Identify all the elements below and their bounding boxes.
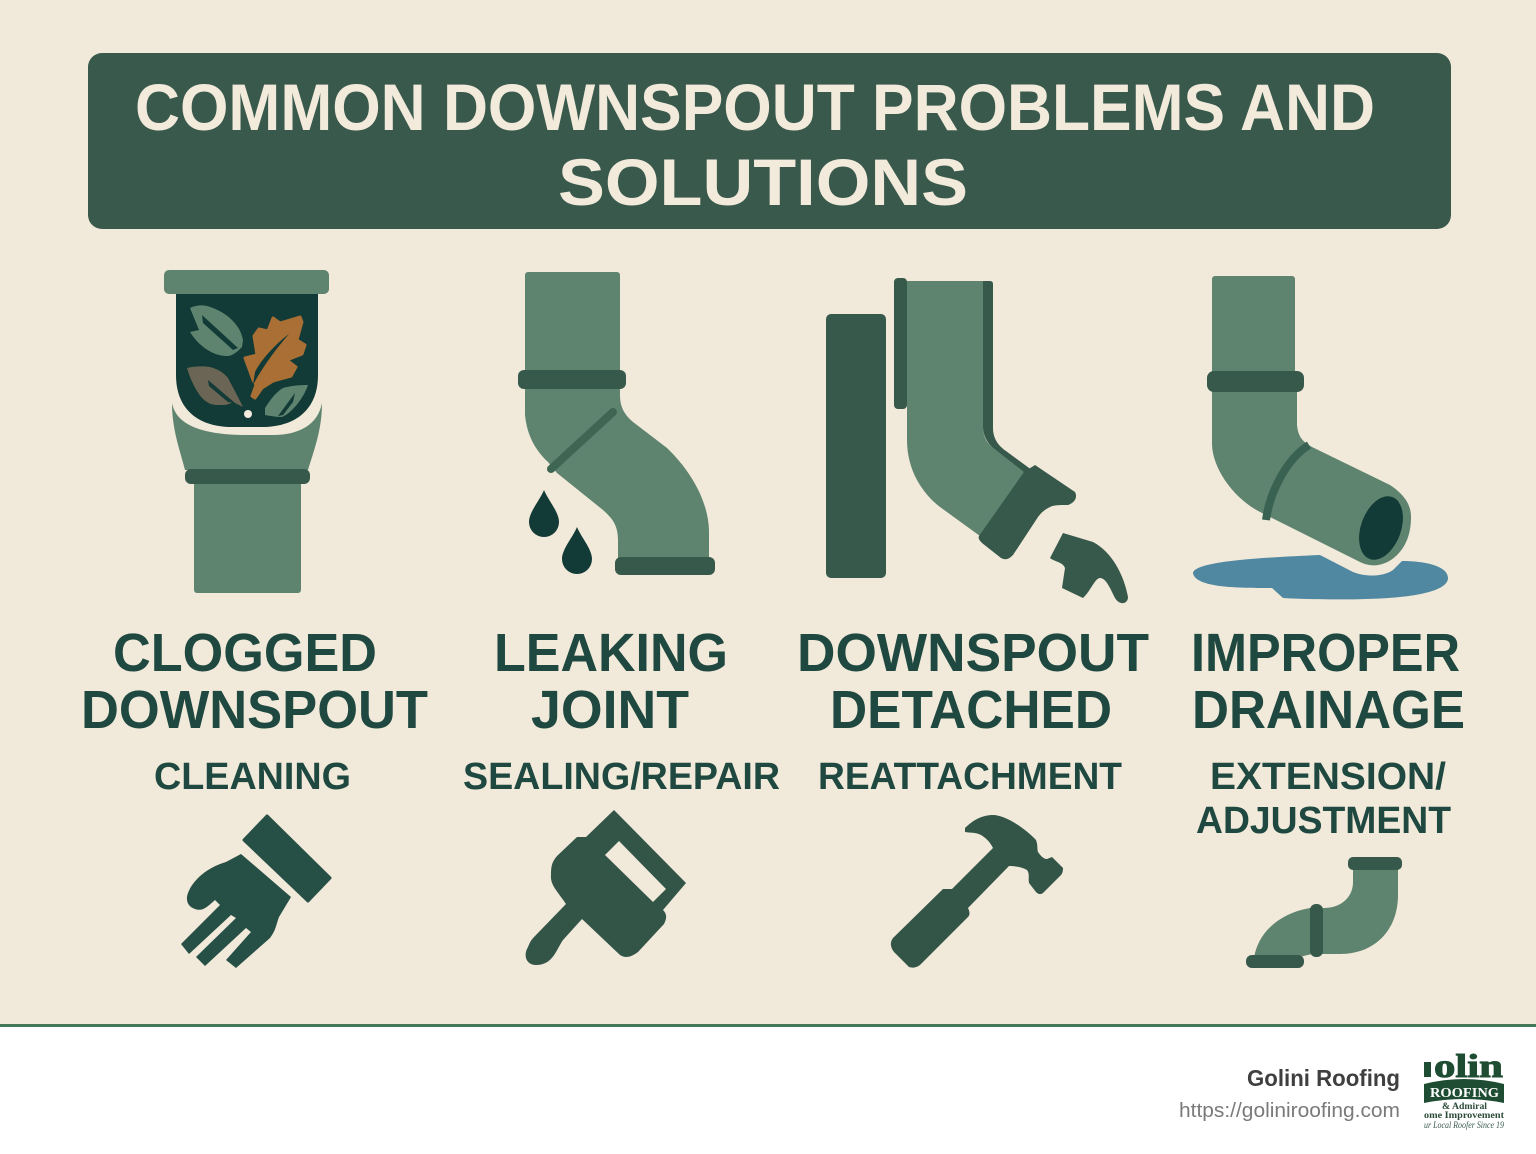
heading: downspout detached — [797, 623, 1149, 740]
heading: improper drainage: DRAINAGE — [1192, 680, 1465, 740]
icon: extension pipe — [1246, 857, 1402, 968]
solution label: extension/adjustment: EXTENSION/ — [1210, 756, 1446, 798]
heading: downspout detached: DETACHED — [830, 680, 1112, 740]
heading: clogged downspout — [81, 623, 428, 740]
title banner: COMMON DOWNSPOUT PROBLEMS AND — [135, 70, 1375, 144]
logo: olin — [1434, 1049, 1503, 1085]
panel: downspout detached — [797, 278, 1149, 968]
heading: clogged downspout: CLOGGED — [113, 623, 377, 683]
icon: misdirected pipe and puddle — [1193, 276, 1448, 599]
panel: clogged downspout — [81, 270, 428, 968]
logo — [1424, 1049, 1505, 1130]
heading: improper drainage: IMPROPER — [1191, 623, 1460, 683]
icon: clogged pipe with leaves — [164, 270, 329, 593]
heading: improper drainage — [1191, 623, 1465, 740]
footer — [0, 1024, 1536, 1154]
panel: leaking joint — [463, 272, 780, 965]
panel: improper drainage — [1191, 276, 1465, 968]
website url: https://goliniroofing.com — [1179, 1100, 1400, 1122]
icon: leaking pipe with drops — [518, 272, 715, 575]
logo: ur Local Roofer Since 19 — [1424, 1120, 1504, 1130]
solution label: extension/adjustment: ADJUSTMENT — [1196, 800, 1451, 842]
heading: leaking joint: JOINT — [531, 680, 689, 740]
logo: & Admiral — [1442, 1101, 1488, 1111]
icon: paint brush — [526, 810, 686, 965]
title banner: SOLUTIONS — [558, 145, 968, 219]
heading: leaking joint: LEAKING — [494, 623, 728, 683]
solution label: cleaning: CLEANING — [154, 756, 351, 798]
brand name: Golini Roofing — [1247, 1065, 1400, 1091]
solution label: sealing/repair: SEALING/REPAIR — [463, 756, 780, 798]
title banner — [88, 53, 1451, 229]
solution label: reattachment: REATTACHMENT — [818, 756, 1122, 798]
logo: ROOFING — [1430, 1086, 1499, 1101]
icon: detached pipe — [826, 278, 1128, 603]
heading: leaking joint — [494, 623, 728, 740]
heading: downspout detached: DOWNSPOUT — [797, 623, 1149, 683]
solution label: extension/adjustment — [1196, 756, 1451, 842]
icon: hammer — [891, 815, 1063, 968]
logo: ome Improvement — [1424, 1111, 1505, 1121]
heading: clogged downspout: DOWNSPOUT — [81, 680, 428, 740]
icon: glove — [181, 816, 330, 968]
